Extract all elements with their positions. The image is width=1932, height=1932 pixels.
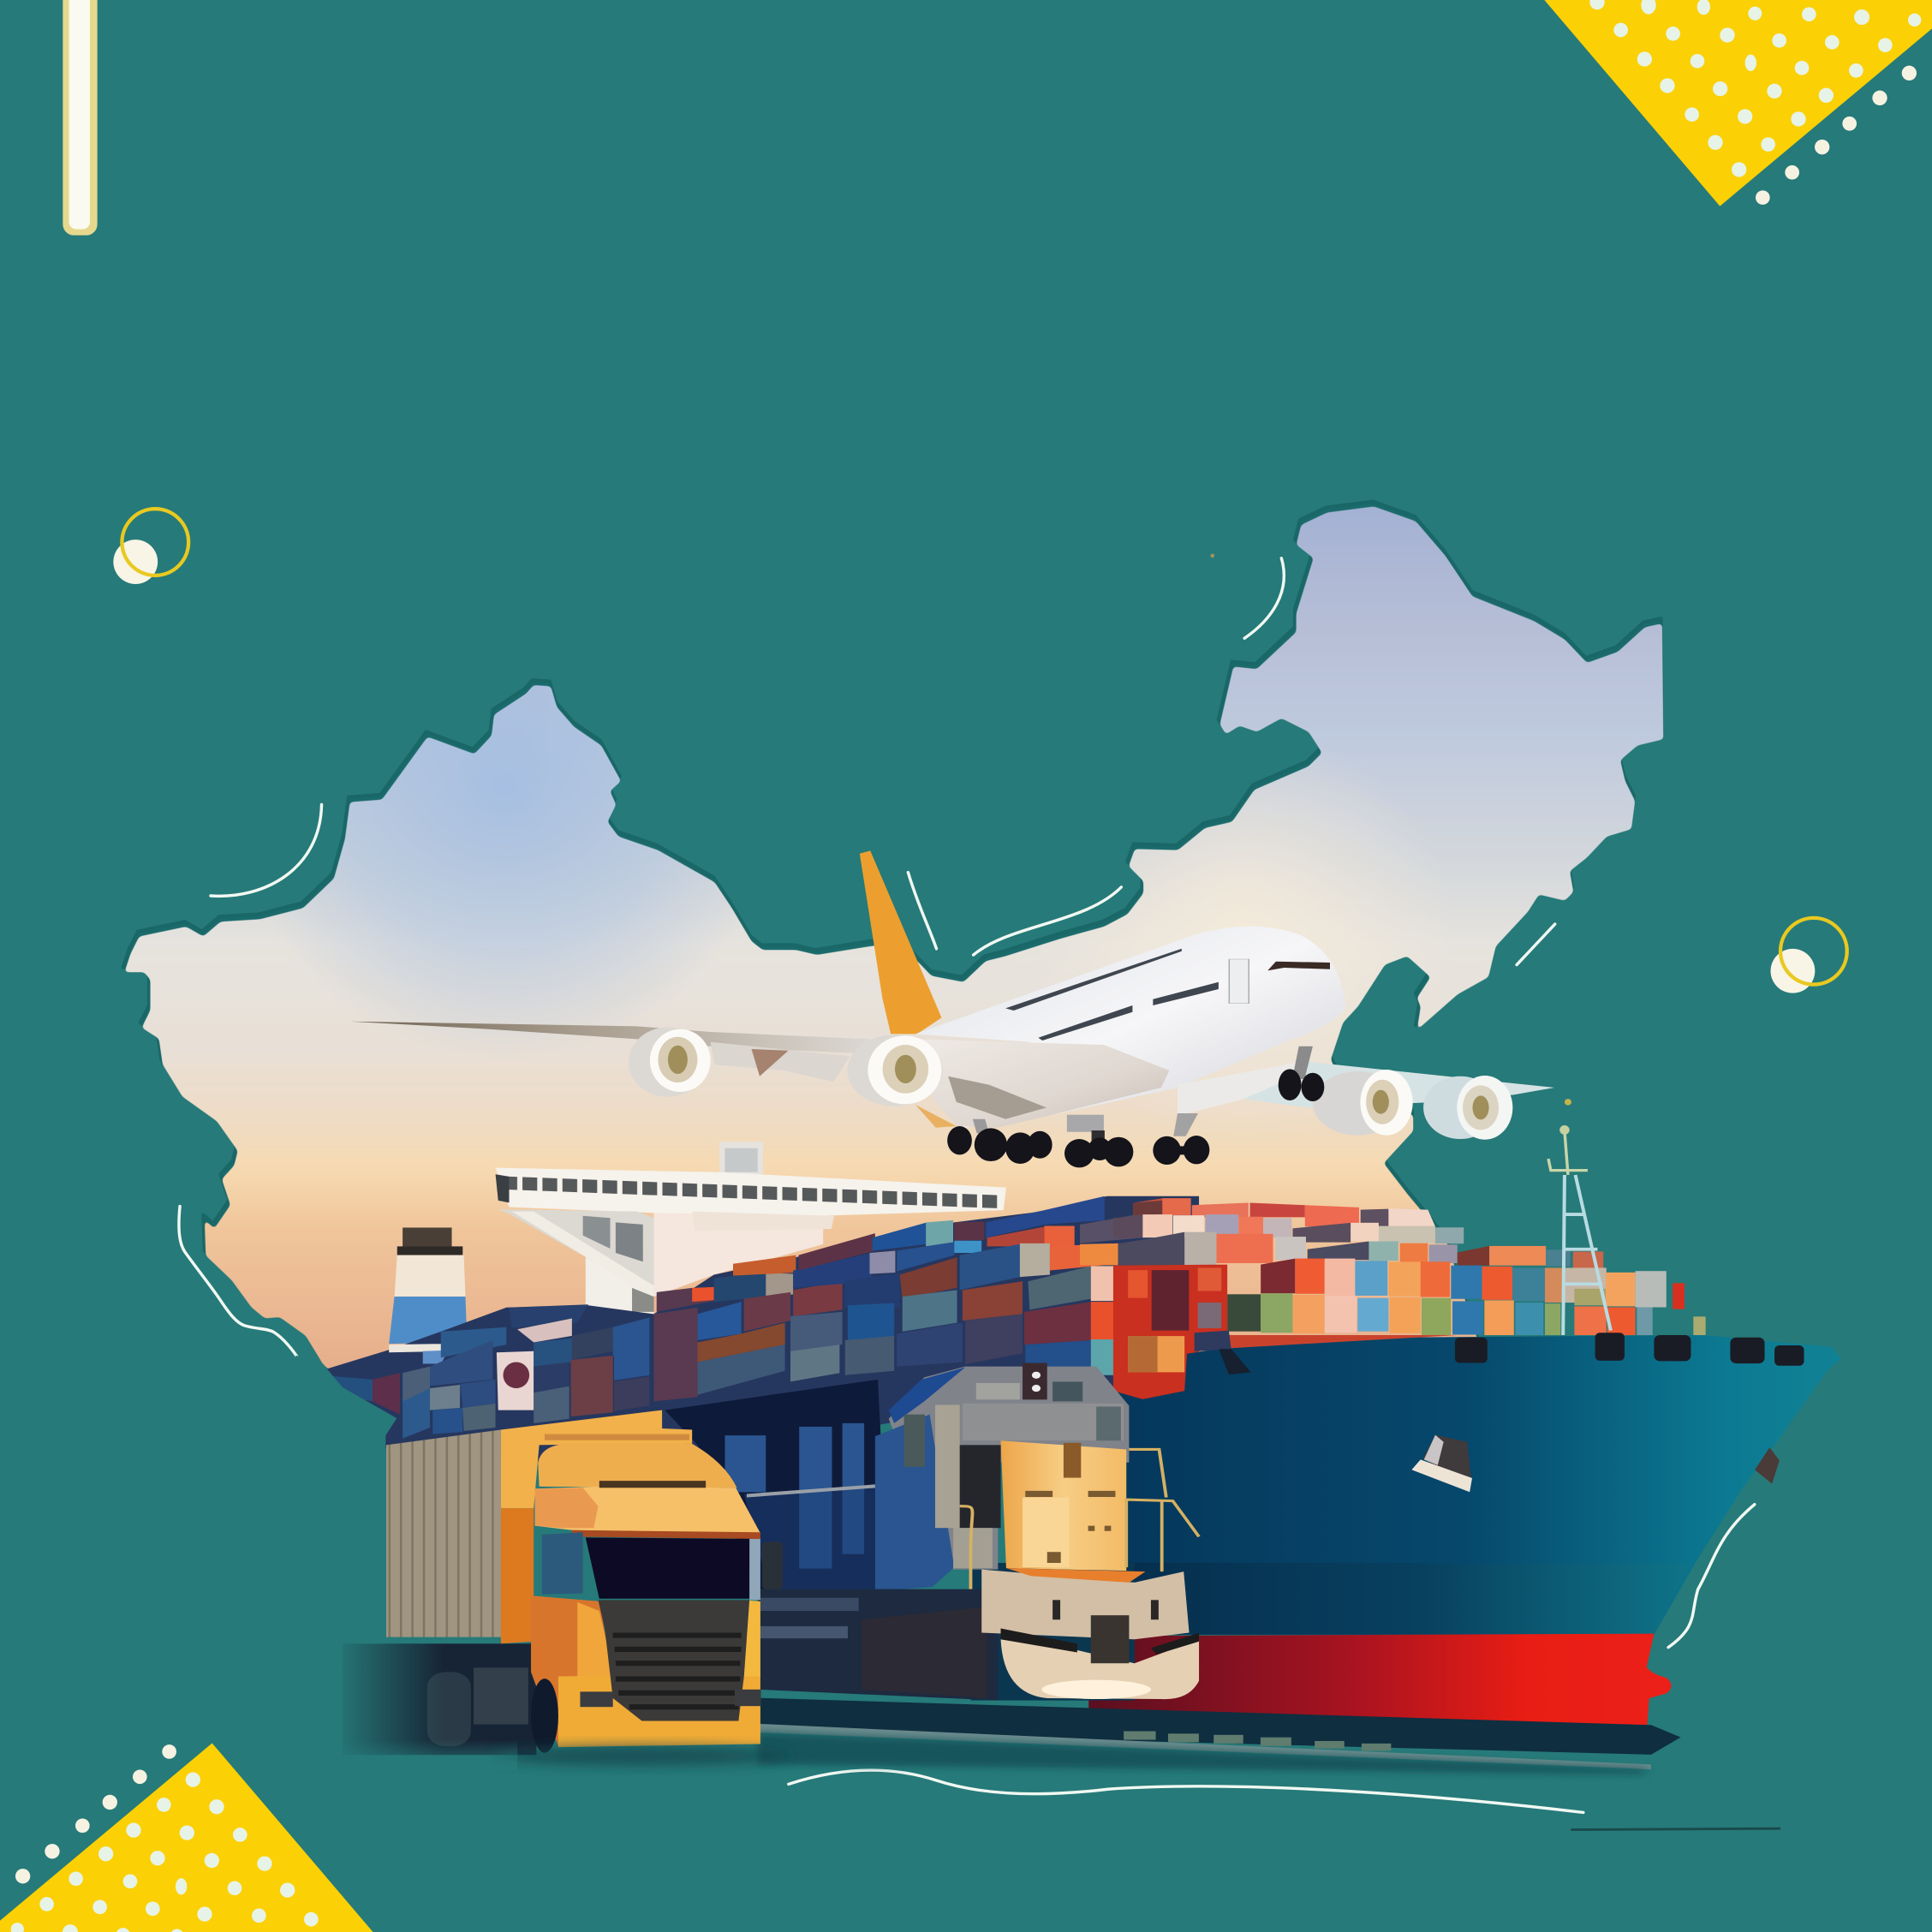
train warning light xyxy=(1023,1363,1047,1399)
engine inner left xyxy=(847,1035,942,1106)
hull anchor xyxy=(1411,1435,1472,1492)
train deck and plow xyxy=(981,1570,1190,1639)
white accent lines xyxy=(179,558,1755,1812)
waterline band xyxy=(1088,1563,1690,1635)
yellow dotted triangle bottom left xyxy=(0,1743,388,1932)
deck containers xyxy=(1113,1198,1706,1348)
circle ornament left xyxy=(113,509,188,584)
cockpit xyxy=(1267,962,1330,970)
door xyxy=(1229,959,1249,1004)
train railings xyxy=(960,1449,1199,1633)
circle ornament right xyxy=(1771,918,1847,993)
truck wheel xyxy=(531,1679,558,1753)
stacked containers xyxy=(320,1196,1199,1463)
nose landing gear xyxy=(1279,1046,1324,1101)
engine outer right xyxy=(1423,1076,1512,1140)
truck chassis xyxy=(343,1643,536,1755)
train and truck section xyxy=(343,1363,1199,1755)
truck windshield xyxy=(586,1537,749,1599)
truck grille xyxy=(598,1600,749,1721)
truck roof fairing xyxy=(538,1444,736,1488)
cabin windows xyxy=(1005,949,1219,1041)
near right wing xyxy=(1243,1061,1554,1107)
stray speck xyxy=(1210,554,1214,558)
container ship stern section xyxy=(320,1142,1199,1463)
fuselage xyxy=(915,927,1345,1128)
yellow dotted triangle top right xyxy=(1544,0,1932,206)
ship bridge superstructure xyxy=(496,1142,1006,1314)
train body xyxy=(665,1380,889,1589)
decorative stick top left xyxy=(63,0,98,236)
truck xyxy=(343,1410,783,1755)
engine outer left xyxy=(629,1027,711,1097)
red bottom paint xyxy=(1088,1634,1672,1725)
map silhouette filled with sky xyxy=(124,506,1663,1429)
tail fin xyxy=(860,850,941,1034)
train yellow nose xyxy=(1001,1440,1126,1571)
red container scaffold xyxy=(1113,1265,1231,1399)
belly and wing root xyxy=(915,1039,1169,1128)
truck lower cab xyxy=(531,1595,613,1746)
left teal fade mask xyxy=(295,1356,789,1771)
dark ground line xyxy=(1571,1828,1780,1830)
trailer xyxy=(386,1430,501,1637)
main landing gear xyxy=(947,1113,1209,1167)
ship hull and bow xyxy=(1088,1099,1841,1725)
ship mast xyxy=(1548,1099,1611,1335)
train cab xyxy=(889,1367,1129,1570)
hull xyxy=(1088,1335,1841,1635)
ship funnel xyxy=(389,1227,467,1344)
map bevel edge xyxy=(123,502,1662,1424)
airplane xyxy=(350,850,1554,1167)
far wing xyxy=(350,1022,870,1053)
engine inner right xyxy=(1313,1070,1413,1136)
rail track and road xyxy=(758,1698,1680,1774)
deck bollards xyxy=(1219,1333,1804,1484)
train undercarriage xyxy=(758,1589,998,1701)
truck cab upper xyxy=(534,1487,760,1533)
locomotive xyxy=(665,1363,1199,1701)
